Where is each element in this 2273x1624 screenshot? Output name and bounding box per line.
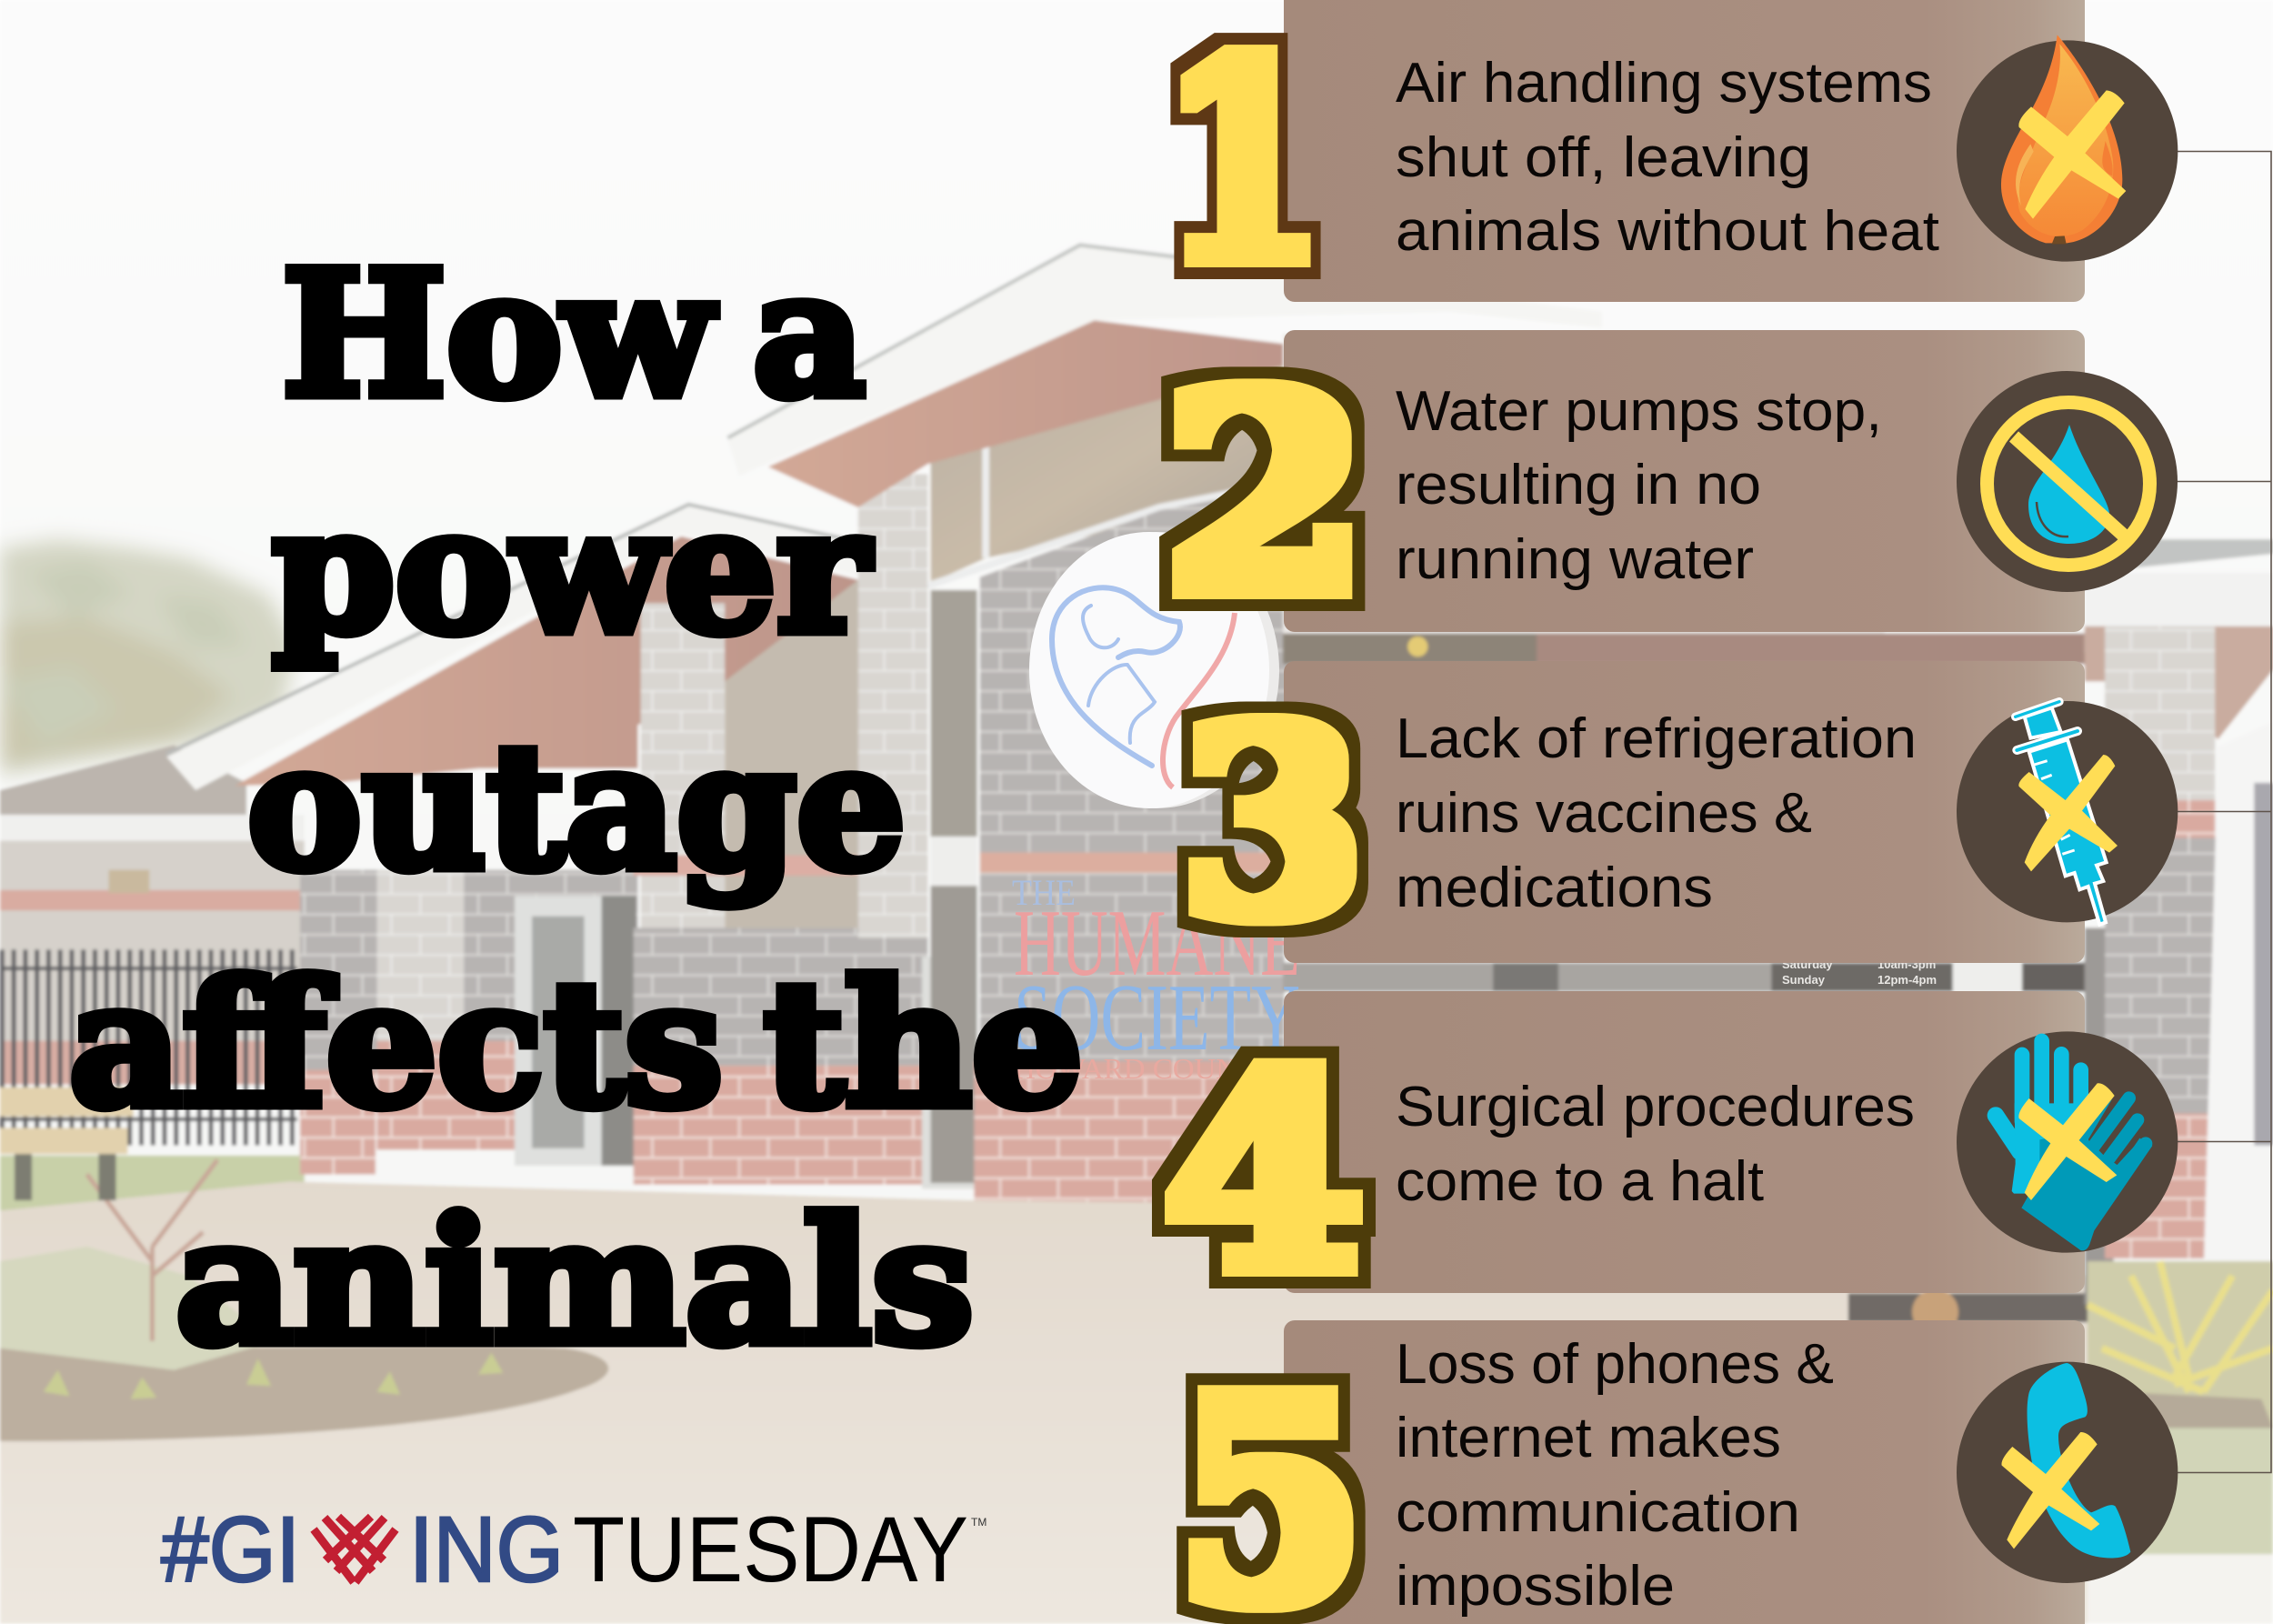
connector lines from icons to the right edge <box>2178 151 2271 1473</box>
text: air handling: shut off, leaving <box>1396 126 1811 189</box>
door hours sign: Sunday <box>1782 973 1826 987</box>
icon: telephone crossed out <box>1957 1362 2178 1583</box>
sign: round humane society logo <box>1029 532 1279 808</box>
text: refrigeration: medications <box>1396 857 1713 919</box>
title <box>69 233 1083 1383</box>
text: air handling <box>1396 52 1939 263</box>
number 4: 4 <box>1162 1014 1366 1331</box>
text: air handling: Air handling systems <box>1396 52 1932 115</box>
text: water: resulting in no <box>1396 454 1761 516</box>
text: water <box>1396 380 1882 591</box>
number 3: 3 <box>1179 671 1365 976</box>
panel 4: surgery <box>1284 991 2085 1293</box>
door hours sign: Saturday <box>1782 957 1833 971</box>
icon: flame crossed out <box>1957 35 2178 262</box>
wall lettering: The Humane Society: SOCIETY <box>1014 964 1300 1070</box>
text: water: Water pumps stop, <box>1396 380 1882 443</box>
logo: #GivingTuesday <box>161 1498 986 1601</box>
door hours sign: 10am-3pm <box>1877 957 1936 971</box>
logo: #GivingTuesday: ING <box>409 1498 564 1601</box>
door hours sign: 12pm-4pm <box>1877 973 1937 987</box>
panel 3: refrigeration <box>1284 661 2085 963</box>
logo: #GivingTuesday: #GI <box>161 1498 300 1601</box>
text: communication: Loss of phones & <box>1396 1333 1834 1396</box>
text: communication: internet makes <box>1396 1407 1781 1469</box>
icon: water drop prohibited <box>1957 371 2178 592</box>
text: refrigeration: Lack of refrigeration <box>1396 707 1917 770</box>
text: water: running water <box>1396 528 1754 591</box>
wall lettering: The Humane Society: HOWARD COUNTY <box>1014 1052 1277 1085</box>
logo: #GivingTuesday: TM <box>971 1516 986 1529</box>
panel 1: air handling <box>1284 0 2085 302</box>
icon: surgical gloves crossed out <box>1957 1031 2178 1253</box>
wall lettering: The Humane Society: THE <box>1012 872 1076 913</box>
text: communication <box>1396 1333 1834 1618</box>
icon: syringe crossed out <box>1957 701 2178 925</box>
number 2: 2 <box>1162 335 1369 656</box>
title: power <box>272 469 872 672</box>
text: refrigeration: ruins vaccines & <box>1396 782 1812 845</box>
text: surgery <box>1396 1076 1915 1213</box>
panel 5: communication <box>1284 1320 2085 1624</box>
number 1: 1 <box>1159 0 1327 325</box>
text: surgery: come to a halt <box>1396 1150 1764 1213</box>
title: animals <box>175 1180 974 1383</box>
title: How a <box>282 233 866 436</box>
text: air handling: animals without heat <box>1396 200 1939 263</box>
text: communication: communication <box>1396 1481 1800 1544</box>
text: surgery: Surgical procedures <box>1396 1076 1915 1138</box>
wall lettering: The Humane Society <box>1012 872 1300 1085</box>
logo: #GivingTuesday: TUESDAY <box>573 1498 968 1601</box>
door hours sign <box>1782 957 1937 987</box>
panel 2: water <box>1284 330 2085 632</box>
title: affects the <box>69 943 1083 1146</box>
title: outage <box>247 706 906 908</box>
wall lettering: The Humane Society: HUMANE <box>1014 889 1300 996</box>
text: refrigeration <box>1396 707 1917 919</box>
text: communication: impossible <box>1396 1555 1675 1618</box>
